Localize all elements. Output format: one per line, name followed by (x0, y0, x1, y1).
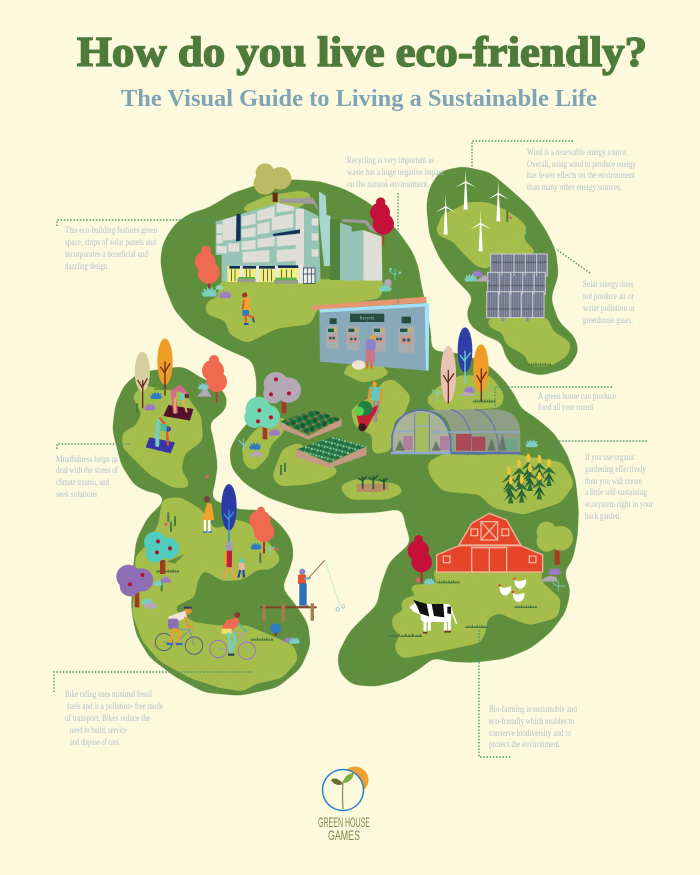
recycle sign: Recycle (359, 317, 374, 322)
vegetable bed one (279, 410, 342, 439)
text: organic gardening: If you use organic (585, 452, 635, 463)
text: mindfulness: seek solutions (56, 490, 97, 500)
cyclist one (155, 607, 203, 654)
glass tower (319, 192, 335, 266)
yoga person two (157, 418, 171, 445)
text: green house: A green house can produce (538, 392, 616, 402)
text: bike riding: Bike riding uses minimal fossil (65, 689, 152, 700)
text: eco-building: incorporates a beneficial and (65, 249, 148, 260)
grass (528, 362, 552, 366)
grass tufts (136, 403, 286, 475)
text: bike riding: fuels and is a pollution- free mode (67, 701, 163, 712)
text: solar: not produce air or (583, 292, 635, 302)
title: How do you live eco-friendly? (77, 30, 647, 76)
icon: beige tree (135, 352, 150, 408)
text: eco-building: space, strips of solar panels and (65, 237, 156, 248)
text: mindfulness (56, 454, 119, 500)
text: eco-building: This eco-building features green (65, 225, 157, 236)
building chimney pipes (280, 198, 377, 233)
text: recycling: waste has a huge negative impact (347, 168, 444, 178)
icon: chickens (498, 577, 526, 604)
person at machine (366, 335, 376, 369)
running child (242, 292, 254, 324)
text: bio-farming: conserve biodiversity and to (489, 729, 571, 739)
greenhouse plants (395, 433, 517, 451)
text: bike riding (65, 689, 163, 748)
illustration: eco building (195, 163, 402, 324)
sign lights (330, 317, 411, 324)
icon: coral tree (195, 246, 220, 289)
logo wordmark: GAMES (328, 827, 360, 843)
text: recycling: Recycling is very important as (347, 156, 434, 166)
text: bio-farming: Bio-farming is sustainable and (489, 704, 577, 715)
icon: crimson tree (370, 197, 394, 245)
text: green house (538, 392, 616, 413)
icon: blue tree (221, 484, 237, 543)
mother and child (223, 541, 245, 579)
shrub and rock (464, 269, 490, 282)
mushroom (164, 475, 278, 551)
illustration: farm (387, 513, 573, 637)
icon: pink tree (441, 346, 456, 403)
yoga mat maroon (163, 405, 193, 421)
shrubs left (201, 284, 232, 298)
logo: Green House Games (318, 766, 370, 843)
station wall (319, 307, 426, 371)
shrubs right of path (250, 542, 275, 555)
solar panels (487, 254, 547, 318)
seedling box (357, 475, 388, 492)
shrubs (432, 386, 496, 402)
logo ring (322, 770, 364, 810)
icon: olive tree (254, 163, 291, 202)
text: solar: Solar energy does (583, 280, 633, 290)
yoga person one (173, 387, 189, 412)
text: wind (527, 148, 636, 193)
text: solar: greenhouse gases. (583, 316, 633, 326)
text: mindfulness: Mindfulness helps us (56, 454, 118, 465)
gardener with wheelbarrow (355, 382, 382, 431)
text: solar (583, 280, 636, 326)
tower shadow column (330, 219, 340, 280)
text: organic gardening: ecosystem right in your (585, 500, 654, 510)
text: organic gardening: back garden. (585, 512, 621, 522)
vegetable bed two (296, 437, 367, 468)
icon: mint tree (144, 532, 185, 574)
text: wind: has fewer effects on the environment (527, 170, 635, 181)
station light edge (319, 303, 429, 371)
text: bike riding: of transport. Bikes reduce the (65, 713, 150, 724)
green islands (113, 167, 578, 695)
text: mindfulness: deal with the stress of (56, 465, 119, 476)
machines (327, 326, 414, 353)
icon: coral tree (202, 355, 227, 403)
teal shrub (525, 439, 539, 447)
shrubs right (379, 268, 402, 292)
text: recycling: on the natural environment. (347, 180, 429, 190)
light green patches (123, 192, 573, 690)
icon: lilac tree (263, 372, 301, 413)
text: wind: Overall, using wind to produce energy (527, 160, 636, 170)
icon: coral tree (249, 507, 274, 553)
shrubs near dock (270, 623, 300, 644)
text: bike riding: need to build, service (70, 726, 127, 736)
ground floor (227, 265, 315, 284)
station roof (311, 297, 427, 310)
logo sprout (331, 773, 354, 809)
icon: orange tree (473, 344, 489, 402)
text: organic gardening: then you will create (585, 477, 642, 487)
illustration: greenhouse and corn (391, 327, 556, 503)
text: mindfulness: climate trauma, and (56, 478, 109, 488)
woman in orange dress (202, 496, 214, 532)
yoga shrubs (144, 388, 167, 410)
grass tufts (387, 604, 537, 637)
grass tufts (156, 512, 273, 641)
logo sun (342, 766, 368, 794)
illustration: park and cycling (116, 475, 345, 659)
logo wordmark: GREEN HOUSE (318, 814, 370, 830)
grass and flower (506, 211, 535, 238)
icon: orange tree (157, 338, 173, 396)
text: eco-building (65, 225, 157, 272)
text: organic gardening: gardening effectively (585, 464, 646, 475)
rock and shrub (197, 382, 212, 397)
icon: cow (409, 600, 457, 634)
text: bio-farming: protect the environment. (489, 740, 561, 750)
cyclist two (210, 612, 255, 659)
icon: crimson tree (408, 535, 432, 583)
text: bio-farming (489, 704, 577, 750)
text: bike riding: and dispose of cars. (70, 737, 120, 748)
icon: wind turbines (435, 169, 509, 251)
illustration: recycling station (311, 297, 429, 379)
illustration: yoga and garden (135, 338, 388, 492)
fisherman (298, 560, 345, 611)
shrubs left (141, 576, 172, 609)
illustration: wind and solar (435, 169, 552, 366)
yoga mat navy (146, 437, 175, 453)
navy accents (236, 214, 300, 241)
recycling bag (352, 360, 365, 370)
icon: corn plants (502, 454, 556, 503)
garden shrubs (238, 428, 281, 457)
text: wind: Wind is a renewable energy source. (527, 148, 628, 158)
text: wind: than many other energy sources. (527, 183, 622, 193)
windows (217, 203, 318, 266)
subtitle: The Visual Guide to Living a Sustainable Life (121, 85, 597, 112)
logo wordmark (318, 814, 370, 843)
text: organic gardening (585, 452, 654, 522)
icon: blue tree (458, 327, 472, 384)
shrubs (415, 567, 566, 592)
wooden dock (260, 603, 317, 621)
text: eco-building: dazzling design. (65, 262, 109, 272)
right block (340, 223, 363, 281)
icon: mint tree (244, 397, 280, 439)
text: recycling (347, 156, 444, 190)
icon: green tree (537, 522, 573, 565)
main block (216, 203, 321, 282)
text: solar: water pollution or (583, 304, 636, 314)
panel feet (501, 318, 529, 321)
text: organic gardening: a little self-sustaining (585, 487, 647, 498)
text: green house: food all year round (538, 402, 593, 413)
callout lines (54, 141, 647, 757)
greenhouse (391, 409, 521, 454)
text: bio-farming: eco-friendly which enables to (489, 716, 574, 727)
ground patch (344, 366, 388, 379)
icon: purple tree (116, 565, 153, 607)
right block white side (363, 230, 382, 281)
icon: barn (437, 513, 543, 572)
